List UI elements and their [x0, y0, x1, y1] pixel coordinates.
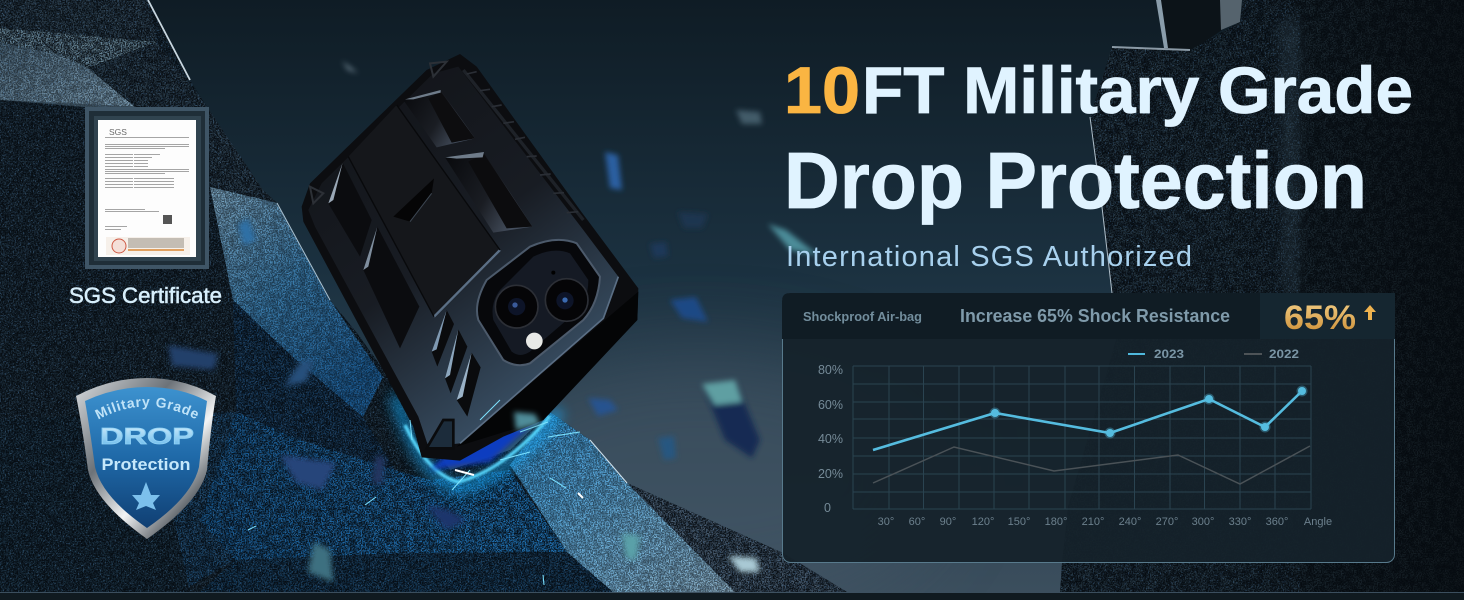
SGS certificate frame — [85, 107, 209, 269]
ridge panels — [403, 90, 475, 147]
impact glow — [395, 395, 560, 488]
legend: 2023 — [1154, 347, 1184, 361]
subtitle: International SGS Authorized — [786, 241, 1192, 273]
lens right — [545, 279, 588, 321]
y axis labels: 20% — [818, 467, 843, 481]
right rock — [1040, 0, 1464, 600]
back plate — [308, 67, 618, 447]
x axis labels: 240° — [1119, 516, 1141, 528]
x axis labels: 210° — [1082, 516, 1104, 528]
hinge — [393, 178, 434, 222]
flash — [526, 333, 543, 349]
x axis labels: 150° — [1008, 516, 1030, 528]
bottom band — [0, 593, 1464, 600]
panel header: Increase 65% Shock Resistance — [960, 306, 1230, 326]
y axis labels: 80% — [818, 363, 843, 377]
legend: 2022 — [1269, 347, 1299, 361]
title line 1: 10 — [784, 53, 860, 127]
2023 series — [873, 387, 1306, 450]
y axis labels — [818, 363, 843, 515]
certificate paper: SGS — [109, 127, 127, 137]
y axis labels: 0 — [824, 501, 831, 515]
x axis labels: 90° — [940, 516, 956, 528]
65 percent callout: 65% — [1284, 299, 1356, 337]
x axis labels — [878, 516, 1332, 528]
rock facets — [0, 0, 860, 600]
y axis labels: 40% — [818, 432, 843, 446]
vents — [432, 310, 454, 367]
side ribs — [463, 70, 583, 220]
sparks — [248, 400, 583, 585]
badge text: protection: Protection — [102, 455, 190, 474]
back rock, top right — [1156, 0, 1242, 52]
x axis labels: 120° — [972, 516, 994, 528]
icon: up arrow — [1364, 305, 1376, 320]
x axis labels: Angle — [1304, 516, 1332, 528]
x axis labels: 30° — [878, 516, 894, 528]
lit rock faces — [0, 42, 735, 592]
flying rock debris — [168, 61, 818, 582]
camera island — [477, 240, 600, 365]
left rock mass — [0, 0, 860, 600]
military grade shield badge — [76, 378, 216, 539]
title line 1: FT Military Grade — [862, 53, 1413, 127]
x axis labels: 360° — [1266, 516, 1288, 528]
title — [784, 53, 1413, 225]
x axis labels: 270° — [1156, 516, 1178, 528]
legend — [1128, 347, 1299, 361]
mic — [551, 271, 555, 275]
y axis labels: 60% — [818, 398, 843, 412]
x axis labels: 180° — [1045, 516, 1067, 528]
case body — [302, 54, 638, 461]
2022 series — [873, 446, 1310, 484]
chart panel — [782, 293, 1395, 562]
x axis labels: 60° — [909, 516, 925, 528]
badge text: drop: DROP — [100, 423, 194, 449]
x axis labels: 330° — [1229, 516, 1251, 528]
lens left — [495, 285, 538, 328]
x axis labels: 300° — [1192, 516, 1214, 528]
kickstand — [348, 105, 500, 317]
corner bumpers — [430, 62, 447, 77]
badge text: military grade: Military Grade — [94, 398, 198, 420]
SGS Certificate caption: SGS Certificate — [69, 283, 222, 308]
badge star — [132, 482, 160, 510]
phone case — [302, 54, 638, 461]
certificate paper — [98, 120, 196, 257]
side shadow — [457, 292, 638, 447]
panel header — [782, 293, 1395, 339]
panel header: Shockproof Air-bag — [803, 310, 922, 324]
line chart — [818, 363, 1332, 528]
title line 2: Drop Protection — [784, 136, 1367, 225]
